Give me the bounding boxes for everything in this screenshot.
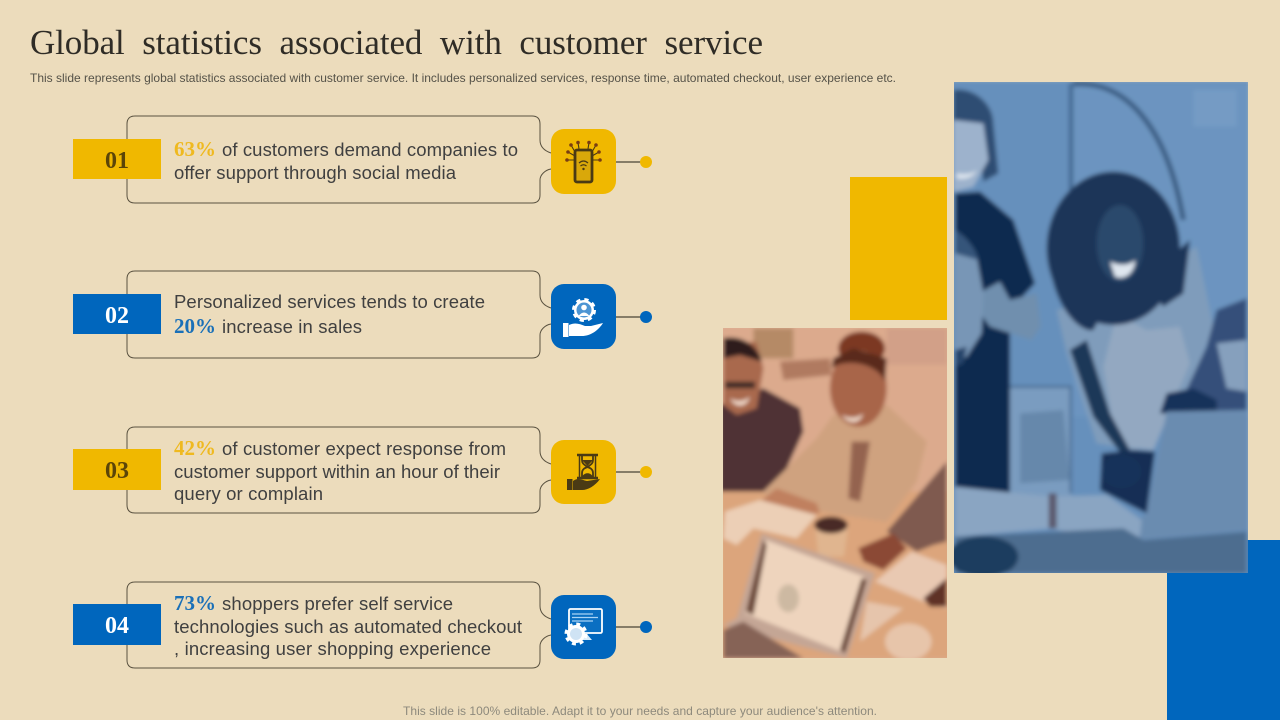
row 2 callout — [73, 271, 652, 358]
row 4 icon: gear and certificate screen — [551, 595, 616, 659]
row 4 number badge: 04 — [105, 613, 129, 639]
row 4 text: , increasing user shopping experience — [174, 638, 491, 659]
row 2 number badge: 02 — [105, 303, 129, 329]
row 2 icon: gear and person over hand — [551, 284, 616, 349]
footer note: This slide is 100% editable. Adapt it to your needs and capture your audience's attention. — [403, 704, 877, 718]
row 4 text: technologies such as automated checkout — [174, 616, 522, 637]
row 1 callout — [73, 116, 652, 203]
row 2 text: increase in sales — [222, 316, 362, 337]
row 1 icon: smartphone with wifi — [551, 129, 616, 194]
row 3 text: customer support within an hour of their — [174, 461, 500, 482]
row 4 connector and dot — [616, 621, 652, 633]
row 1 number badge: 01 — [105, 148, 129, 174]
row 1 text: offer support through social media — [174, 162, 457, 183]
row 3 connector and dot — [616, 466, 652, 478]
row 3 text: query or complain — [174, 483, 323, 504]
row 2 text: 20% — [174, 314, 216, 338]
subtitle: This slide represents global statistics associated with customer service. It includes personalized services, response time, automated checkout, user experience etc. — [30, 71, 896, 85]
row 4 callout — [73, 582, 652, 668]
row 1 outline — [127, 116, 551, 203]
row 2 connector and dot — [616, 311, 652, 323]
row 1 number badge — [73, 139, 161, 179]
row 4 outline — [127, 582, 551, 668]
title: Global statistics associated with customer service — [30, 23, 763, 62]
row 2 number badge — [73, 294, 161, 334]
row 1 text: of customers demand companies to — [222, 139, 518, 160]
decorative blue block — [1167, 540, 1280, 720]
row 1 connector and dot — [616, 156, 652, 168]
row 3 number badge — [73, 449, 161, 490]
row 4 text — [174, 591, 522, 659]
row 1 text — [174, 137, 518, 183]
row 2 outline — [127, 271, 551, 358]
row 1 text: 63% — [174, 137, 216, 161]
row 2 text: Personalized services tends to create — [174, 291, 485, 312]
decorative yellow block — [850, 177, 947, 320]
row 4 number badge — [73, 604, 161, 645]
photo: colleagues at a meeting table — [720, 325, 953, 662]
row 3 text — [174, 436, 506, 504]
row 3 number badge: 03 — [105, 458, 129, 484]
row 4 text: 73% — [174, 591, 216, 615]
row 3 text: 42% — [174, 436, 216, 460]
row 3 outline — [127, 427, 551, 513]
row 4 text: shoppers prefer self service — [222, 593, 453, 614]
row 2 text — [174, 291, 485, 338]
row 3 callout — [73, 427, 652, 513]
row 3 text: of customer expect response from — [222, 438, 506, 459]
row 3 icon: hourglass over hand — [551, 440, 616, 504]
photo: team around a laptop — [948, 80, 1250, 580]
